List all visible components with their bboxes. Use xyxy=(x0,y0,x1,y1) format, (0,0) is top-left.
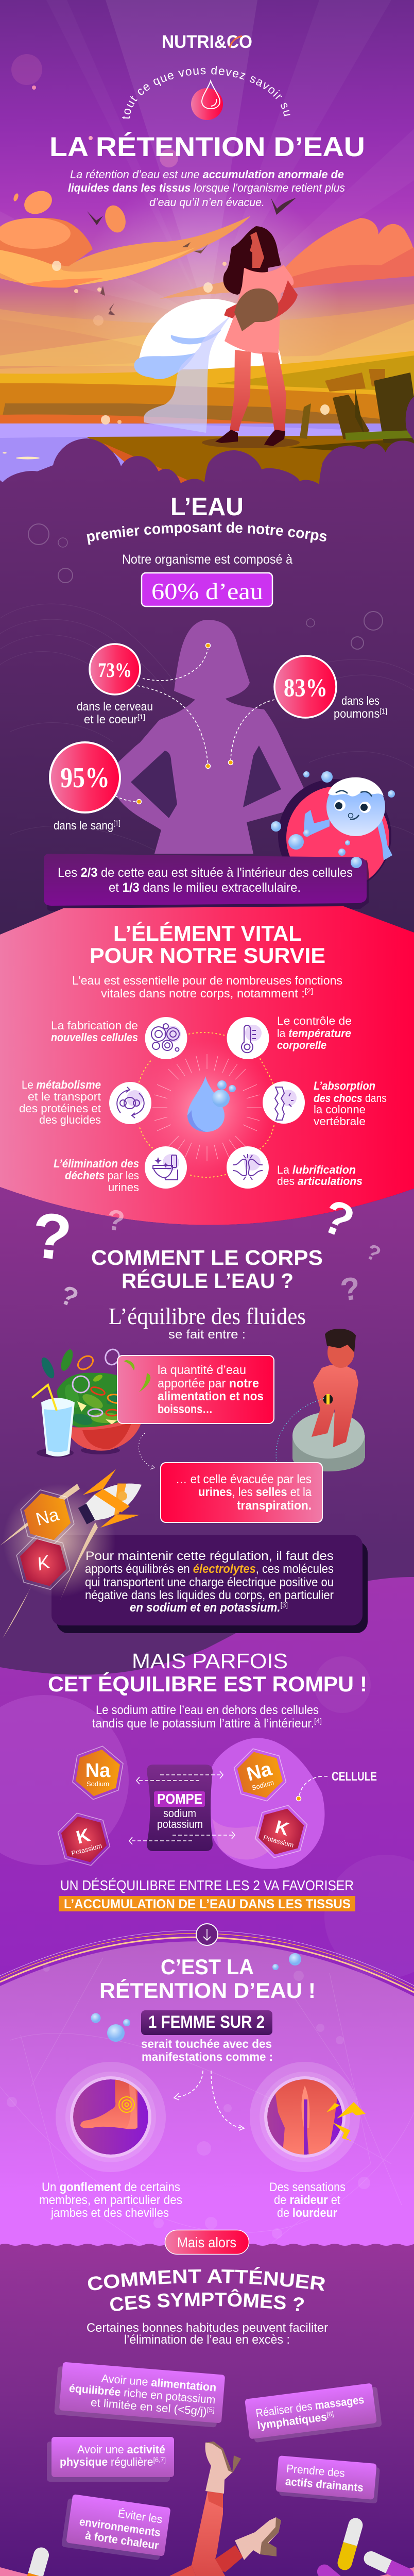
callout: 2/3: et 1/3 dans le milieu extracellulaire. xyxy=(109,880,301,895)
text: symptom left xyxy=(39,2180,182,2220)
icon: arrow down xyxy=(196,1924,218,1945)
card: avoid heat xyxy=(61,2494,171,2561)
background: faint circles xyxy=(0,1656,414,1978)
card: draining actives: actifs drainants xyxy=(285,2475,364,2494)
hexagon: sodium right: Sodium xyxy=(251,1778,275,1792)
card: massages: [8] xyxy=(326,2410,334,2418)
text: manifestations: serait touchée avec des xyxy=(141,2037,272,2050)
heading: it's water retention: RÉTENTION D’EAU ! xyxy=(99,1978,316,2003)
card: massages: lymphatiques xyxy=(256,2410,331,2432)
label: 73%: dans le cerveau xyxy=(77,700,153,713)
intro paragraph: liquides dans les tissus lorsque l’organisme retient plus xyxy=(68,181,345,194)
card: physical activity: physique régulière xyxy=(60,2455,155,2468)
card: avoid heat: Éviter les xyxy=(117,2507,163,2526)
illustration: salad and water xyxy=(32,1347,153,1458)
text box: intake xyxy=(117,1355,274,1423)
card: massages: Réaliser des massages xyxy=(255,2393,365,2419)
labels: vital functions: des articulations xyxy=(277,1175,363,1188)
badge: 1 woman in 2: 1 FEMME SUR 2 xyxy=(148,2012,265,2032)
silhouette: body xyxy=(116,620,305,854)
hexagon: potassium left: Potassium xyxy=(71,1842,103,1857)
heading: L'EAU: L’EAU xyxy=(170,493,244,521)
heading: but sometimes xyxy=(48,1649,367,1696)
text box: intake: apportée par notre xyxy=(158,1377,259,1391)
symptom: stiffness xyxy=(250,2062,366,2172)
text: good habits: l’élimination de l’eau en excès : xyxy=(124,2333,290,2347)
label: 83%: dans les xyxy=(341,694,380,707)
subheading: fluid balance: L’équilibre des fluides xyxy=(109,1303,306,1329)
heading: but sometimes: CET ÉQUILIBRE EST ROMPU ! xyxy=(48,1672,367,1696)
button: but then xyxy=(165,2230,249,2255)
illustration: rocket and electrolytes: Na xyxy=(33,1504,61,1530)
labels: vital functions: des protéines et xyxy=(19,1102,101,1115)
heading: vital element: POUR NOTRE SURVIE xyxy=(90,943,325,968)
labels: vital functions: La lubrification xyxy=(277,1163,356,1176)
text: sodium potassium xyxy=(92,1703,322,1731)
callout: electrolytes: [3] xyxy=(281,1601,288,1609)
ground bands xyxy=(0,351,414,428)
pills xyxy=(0,2516,414,2576)
callout: electrolytes xyxy=(51,1535,368,1633)
logo: top: NUTRI&CO xyxy=(162,32,252,52)
icons: question marks: ? xyxy=(28,1199,75,1275)
label: 73% xyxy=(77,700,153,726)
text box: output xyxy=(161,1463,322,1522)
icon: toilet xyxy=(145,1146,187,1189)
text: sodium potassium: Le sodium attire l’eau en dehors des cellules xyxy=(96,1703,319,1717)
labels: vital functions: corporelle xyxy=(277,1039,326,1052)
text: intro: [2] xyxy=(305,987,313,995)
text: imbalance xyxy=(59,1877,355,1911)
card: avoid heat: à forte chaleur xyxy=(84,2529,160,2552)
callout: electrolytes: qui transportent une charge électrique positive ou xyxy=(85,1575,334,1589)
labels: vital functions: L’absorption xyxy=(314,1079,375,1092)
icons: question marks: ? xyxy=(338,1270,363,1308)
text: manifestations xyxy=(141,2037,273,2063)
intro paragraph: d’eau qu’il n’en évacue. xyxy=(149,196,265,209)
text: imbalance: L’ACCUMULATION DE L’EAU DANS LES TISSUS xyxy=(64,1897,351,1911)
stat: 95% xyxy=(50,742,120,812)
label: 83%: poumons xyxy=(334,707,383,720)
callout: 60%: 60% d’eau xyxy=(151,578,263,604)
callout: electrolytes: négative dans les liquides du corps, en particulier xyxy=(85,1588,334,1602)
card: physical activity: [6,7] xyxy=(153,2456,166,2464)
icon: new cells xyxy=(145,1017,187,1059)
heading: but sometimes: MAIS PARFOIS xyxy=(132,1649,288,1673)
heading: it's water retention xyxy=(99,1955,316,2003)
hexagon: potassium left: K xyxy=(74,1824,92,1848)
heading: it's water retention: C’EST LA xyxy=(161,1955,254,1979)
legs xyxy=(230,350,251,431)
text: symptom right: de lourdeur xyxy=(277,2206,337,2220)
card: avoid heat: environnements xyxy=(79,2515,161,2539)
connectors: dashed lines xyxy=(115,649,375,860)
card: draining actives: Prendre des xyxy=(286,2462,346,2480)
labels: vital functions: vertébrale xyxy=(314,1115,366,1128)
decoration: dotted ring xyxy=(139,1032,274,1177)
labels: vital functions: des glucides xyxy=(39,1113,101,1126)
callout: electrolytes: Pour maintenir cette régulation, il faut des xyxy=(85,1549,334,1563)
text: good habits xyxy=(87,2321,328,2347)
labels: vital functions: nouvelles cellules xyxy=(51,1031,138,1044)
labels: vital functions: la colonne xyxy=(314,1103,366,1116)
heading: how the body regulates: COMMENT LE CORPS xyxy=(91,1246,323,1269)
text: symptom right: Des sensations xyxy=(269,2180,346,2194)
labels: vital functions: Le contrôle de xyxy=(277,1014,352,1027)
card: balanced diet: équilibrée riche en potassium xyxy=(68,2382,216,2406)
subheading: fluid balance xyxy=(109,1303,306,1342)
panel: regulation lower background xyxy=(0,1577,414,2035)
text box: intake: la quantité d’eau xyxy=(158,1363,246,1377)
label: POMPE xyxy=(154,1791,205,1831)
illustration: legs in the air xyxy=(159,2442,281,2576)
card: balanced diet: [5] xyxy=(206,2405,215,2414)
stat: 95%: 95% xyxy=(60,762,110,794)
text: symptom right xyxy=(269,2180,346,2220)
jar xyxy=(234,289,279,331)
text box: intake: alimentation et nos xyxy=(158,1389,264,1403)
heading: vital element xyxy=(90,921,325,968)
arrow: dotted xyxy=(139,1398,325,1469)
panel: vital element xyxy=(0,906,414,1225)
ground island xyxy=(87,435,414,495)
panel: water composition xyxy=(0,397,414,935)
rocks xyxy=(325,372,366,392)
heading: reduce symptoms: COMMENT ATTÉNUER xyxy=(88,2267,325,2291)
sun xyxy=(139,299,282,369)
heading: reduce symptoms: CES SYMPTÔMES ? xyxy=(110,2289,304,2311)
icons: question marks: ? xyxy=(363,1239,385,1266)
label: 73%: et le coeur xyxy=(84,713,139,726)
arrows xyxy=(129,1771,327,1844)
icon: central drop xyxy=(139,1041,273,1175)
bubble over box xyxy=(351,857,362,868)
text: intro xyxy=(72,974,342,1000)
labels: vital functions: des chocs dans xyxy=(314,1092,387,1105)
heading: reduce symptoms xyxy=(88,2267,325,2311)
intro paragraph: La rétention d’eau est une accumulation anormale de xyxy=(70,168,344,181)
labels: vital functions: la température xyxy=(277,1027,351,1040)
diagram: sodium potassium pump xyxy=(55,1738,377,1871)
callout: electrolytes: en sodium et en potassium. xyxy=(130,1601,281,1615)
callout: 2/3 xyxy=(44,854,369,911)
card: balanced diet: et limitée en sel (<5g/j) xyxy=(90,2396,205,2418)
icons: question marks: ? xyxy=(56,1280,82,1314)
button: but then: Mais alors xyxy=(177,2234,236,2250)
card: massages xyxy=(245,2382,382,2443)
hexagon: potassium right: Potassium xyxy=(263,1834,295,1849)
panel: water retention dome xyxy=(0,1924,414,2257)
labels: vital functions: L’élimination des xyxy=(54,1157,139,1170)
text: symptom left: jambes et des chevilles xyxy=(50,2206,169,2220)
label: 95%: [1] xyxy=(113,819,120,827)
stat: 83% xyxy=(274,656,336,718)
text: sodium potassium: [4] xyxy=(314,1717,322,1725)
text: imbalance: UN DÉSÉQUILIBRE ENTRE LES 2 VA FAVORISER xyxy=(60,1877,354,1893)
text: manifestations: manifestations comme : xyxy=(142,2050,273,2063)
hexagon: sodium right: Na xyxy=(245,1758,274,1786)
icon: spine xyxy=(263,1081,305,1124)
panel: how to reduce symptoms xyxy=(0,2230,414,2576)
illustration: person on pedestal xyxy=(292,1329,365,1471)
illustration: water drop character xyxy=(271,771,395,892)
panel: body regulation background xyxy=(0,1187,414,1700)
shape: pump xyxy=(147,1765,213,1851)
label: 83%: [1] xyxy=(380,707,387,715)
text: organisme: Notre organisme est composé à xyxy=(122,552,292,567)
intro paragraph xyxy=(68,168,345,209)
label: CELLULE: CELLULE xyxy=(332,1770,377,1784)
label: 73%: [1] xyxy=(137,713,145,721)
panel: nutra section xyxy=(0,2518,414,2576)
card: balanced diet: Avoir une alimentation xyxy=(101,2372,217,2394)
icons: question marks: ? xyxy=(105,1203,127,1238)
icons: question marks xyxy=(28,1189,385,1314)
hexagon: potassium left xyxy=(55,1807,113,1871)
hexagon: sodium left: Na xyxy=(85,1760,111,1782)
hexagon: sodium right xyxy=(231,1743,289,1807)
text box: output: transpiration. xyxy=(237,1499,312,1513)
subheading: premier composant: premier composant de notre corps xyxy=(87,521,326,545)
icons: bubbles xyxy=(91,1953,301,2042)
stat: 73% xyxy=(90,644,140,694)
labels: vital functions: et le transport xyxy=(28,1090,101,1103)
stat: 73%: 73% xyxy=(98,658,132,682)
stat: 83%: 83% xyxy=(284,673,327,702)
text: symptom right: de raideur et xyxy=(274,2193,340,2207)
text: intro: vitales dans notre corps, notamment : xyxy=(101,987,299,1000)
label: POMPE: POMPE xyxy=(157,1791,202,1807)
illustration: rocket and electrolytes xyxy=(0,1462,153,1638)
card: physical activity xyxy=(47,2437,174,2482)
heading: how the body regulates: RÉGULE L’EAU ? xyxy=(122,1269,294,1293)
figure: woman pouring water xyxy=(215,226,298,446)
card: balanced diet xyxy=(54,2362,225,2428)
panel: hero illustration xyxy=(0,0,414,495)
labels: vital functions: La fabrication de xyxy=(51,1019,138,1032)
label: 95%: dans le sang xyxy=(54,819,120,832)
leaf over box xyxy=(124,1360,150,1392)
card: draining actives xyxy=(275,2455,381,2503)
label: POMPE: potassium xyxy=(157,1818,203,1831)
labels: vital functions: urines xyxy=(108,1181,139,1194)
labels: vital functions: Le métabolisme xyxy=(22,1078,101,1091)
icon: joints xyxy=(227,1146,269,1189)
label: 83% xyxy=(334,694,387,720)
text: intro: L’eau est essentielle pour de nombreuses fonctions xyxy=(72,974,342,987)
illustration: rocket and electrolytes: K xyxy=(34,1551,53,1574)
text box: output: … et celle évacuée par les xyxy=(176,1472,312,1486)
label: POMPE: sodium xyxy=(163,1807,196,1820)
icon: metabolism xyxy=(109,1082,151,1124)
subheading: fluid balance: se fait entre : xyxy=(168,1328,246,1342)
title: LA RÉTENTION D’EAU xyxy=(49,131,365,162)
hexagon: sodium left xyxy=(70,1742,126,1804)
symptom: swelling xyxy=(56,2062,166,2172)
text: symptom left: membres, en particulier des xyxy=(39,2193,182,2207)
text box: intake: boissons… xyxy=(158,1402,213,1416)
text: sodium potassium: tandis que le potassium l’attire à l’intérieur. xyxy=(92,1717,325,1731)
water xyxy=(0,423,414,490)
shape: cell xyxy=(206,1738,324,1869)
icon: thermometer xyxy=(227,1017,269,1059)
heading: vital element: L’ÉLÉMENT VITAL xyxy=(113,921,302,945)
text box: output: urines, les selles et la xyxy=(198,1485,312,1499)
icon: water drop xyxy=(191,81,223,120)
hexagon: sodium left: Sodium xyxy=(87,1780,109,1788)
card: physical activity: Avoir une activité xyxy=(77,2443,165,2456)
arrows: to symptoms xyxy=(174,2071,244,2130)
labels: vital functions xyxy=(19,1014,387,1194)
callout: electrolytes: apports équilibrés en électrolytes, ces molécules xyxy=(85,1562,334,1576)
hexagon: potassium right xyxy=(252,1800,310,1863)
hexagon: potassium right: K xyxy=(273,1816,291,1840)
heading: how the body regulates xyxy=(91,1246,323,1293)
text: symptom left: Un gonflement de certains xyxy=(42,2180,180,2194)
text: good habits: Certaines bonnes habitudes peuvent faciliter xyxy=(87,2321,328,2335)
icons: question marks: ? xyxy=(315,1189,361,1249)
callout: 2/3: Les 2/3 de cette eau est située à l'intérieur des cellules xyxy=(58,866,353,880)
callout: 60% xyxy=(142,573,272,606)
labels: vital functions: déchets par les xyxy=(65,1169,139,1182)
water stream from the jar xyxy=(134,353,196,379)
